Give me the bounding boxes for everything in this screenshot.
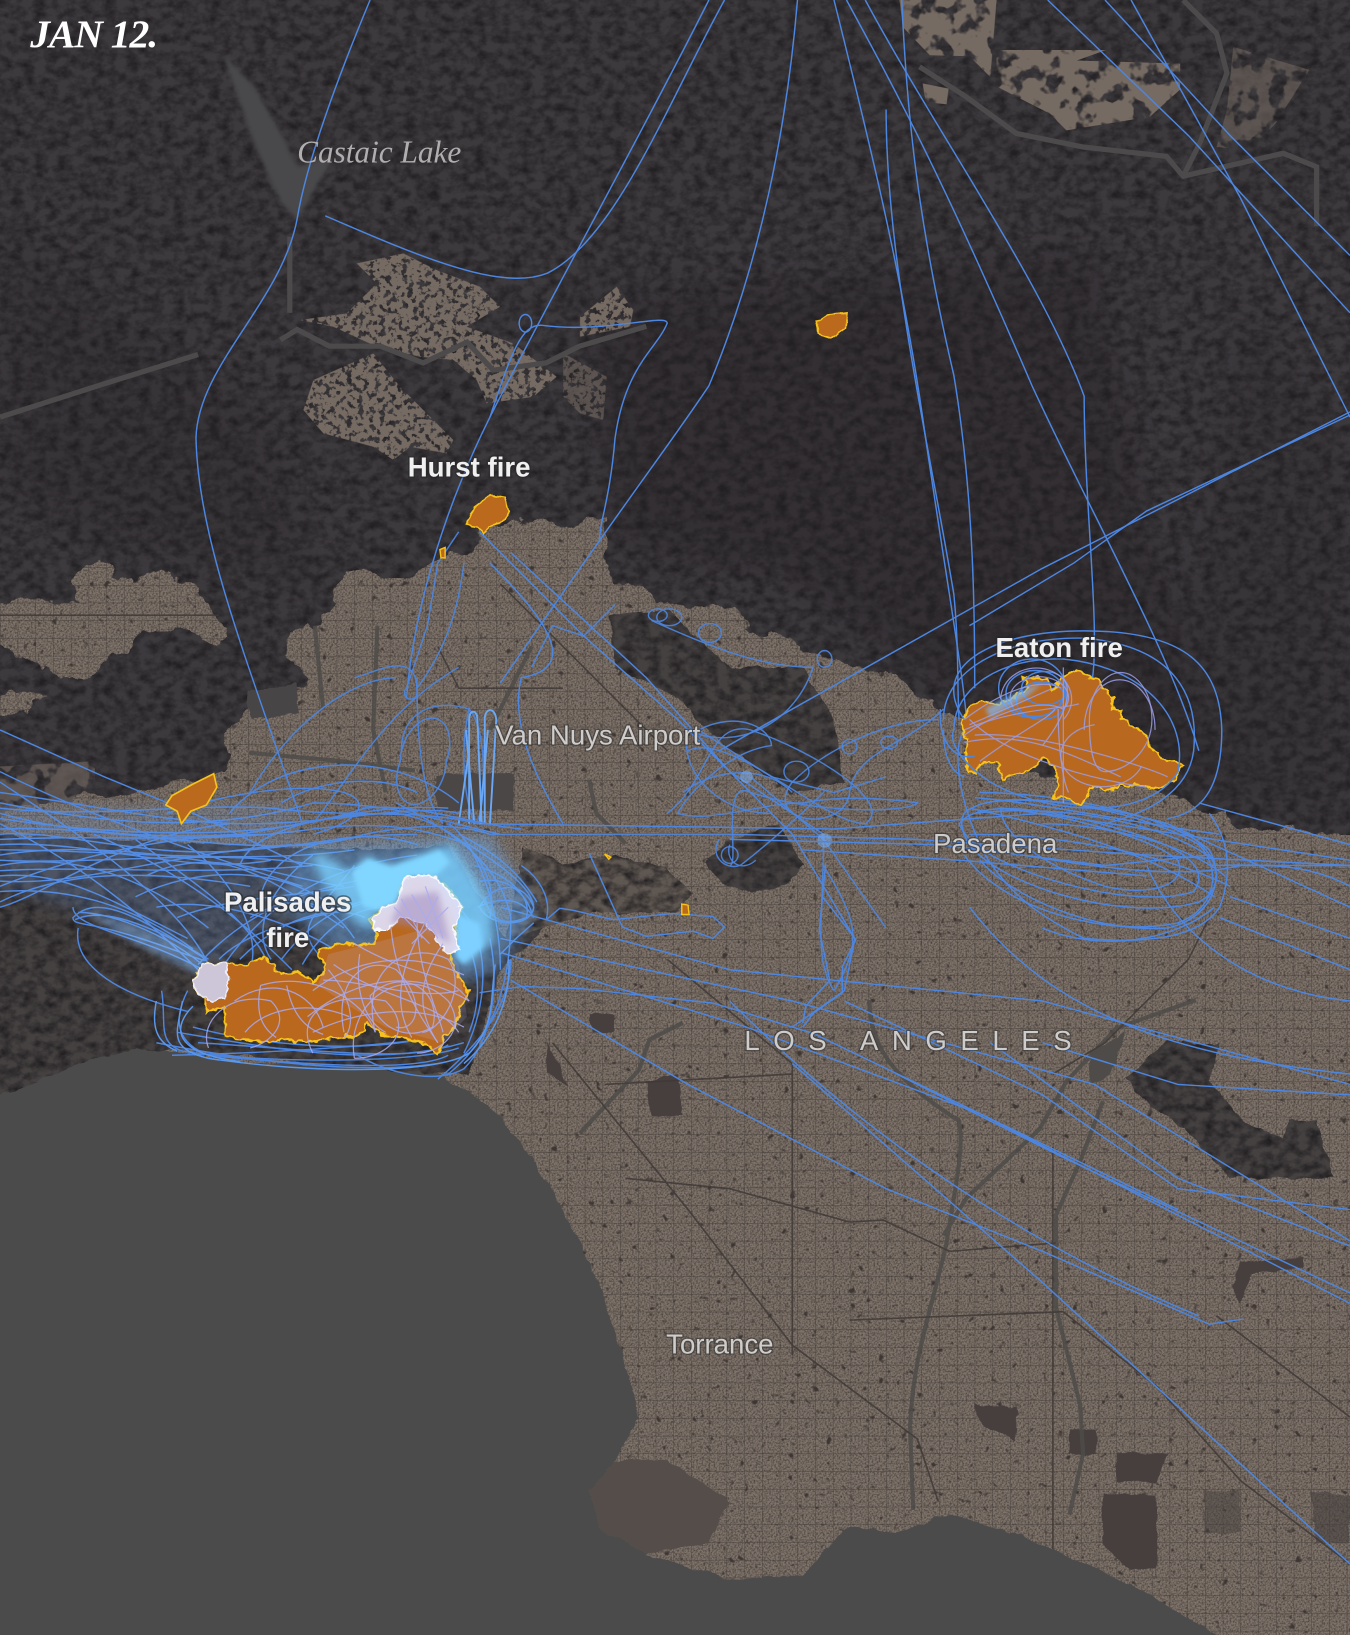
highways and rivers [0, 584, 1350, 1564]
fire overlay: dense lilac flight areas [193, 874, 462, 1002]
label: Hurst fire: Hurst fire [408, 452, 530, 483]
flight paths: Palisades bundle [0, 765, 537, 1079]
desert and valley towns [0, 0, 1309, 824]
label: Van Nuys Airport: Van Nuys Airport [495, 720, 701, 751]
label: Palisades fire: fire [266, 922, 309, 953]
dense cyan flight cluster [310, 845, 493, 967]
flight paths: Eaton south loops [730, 730, 1241, 941]
label: Castaic Lake: Castaic Lake [297, 135, 461, 170]
Eaton fire: flight paths over the burn [964, 667, 1168, 803]
fire: Palisades [193, 875, 469, 1054]
flight paths: Van Nuys approach [459, 710, 496, 824]
fire: small north [815, 313, 846, 338]
label: Torrance: Torrance [666, 1328, 774, 1359]
Castaic Lake water [222, 52, 334, 219]
dark hills over the city [0, 610, 1350, 1570]
fire: Eaton [962, 671, 1183, 807]
label: Pasadena: Pasadena [933, 828, 1058, 859]
fire: small spots [440, 547, 689, 914]
lilac interior [391, 892, 450, 944]
flight paths around the fire's south side [154, 959, 509, 1070]
label: Los Angeles: LOS ANGELES [744, 1025, 1085, 1056]
flight paths over the Palisades fire [206, 886, 469, 1058]
Eaton fire loops [940, 631, 1222, 824]
cooling area over the east of the burn [318, 928, 467, 1043]
ocean [0, 1048, 1251, 1635]
flight haze [0, 803, 537, 991]
flight paths: valley tangle [250, 532, 943, 991]
urban areas [0, 516, 1350, 1635]
Eaton fire: hot spot [985, 683, 1042, 717]
rivers in the mountains [0, 0, 1317, 417]
title: JAN 12. [29, 12, 157, 56]
label: Palisades fire: Palisades [224, 886, 351, 917]
fire: Hurst [466, 494, 509, 534]
label: Eaton fire: Eaton fire [995, 632, 1123, 663]
flight hot spots [740, 771, 832, 848]
fire: small west [166, 774, 217, 824]
